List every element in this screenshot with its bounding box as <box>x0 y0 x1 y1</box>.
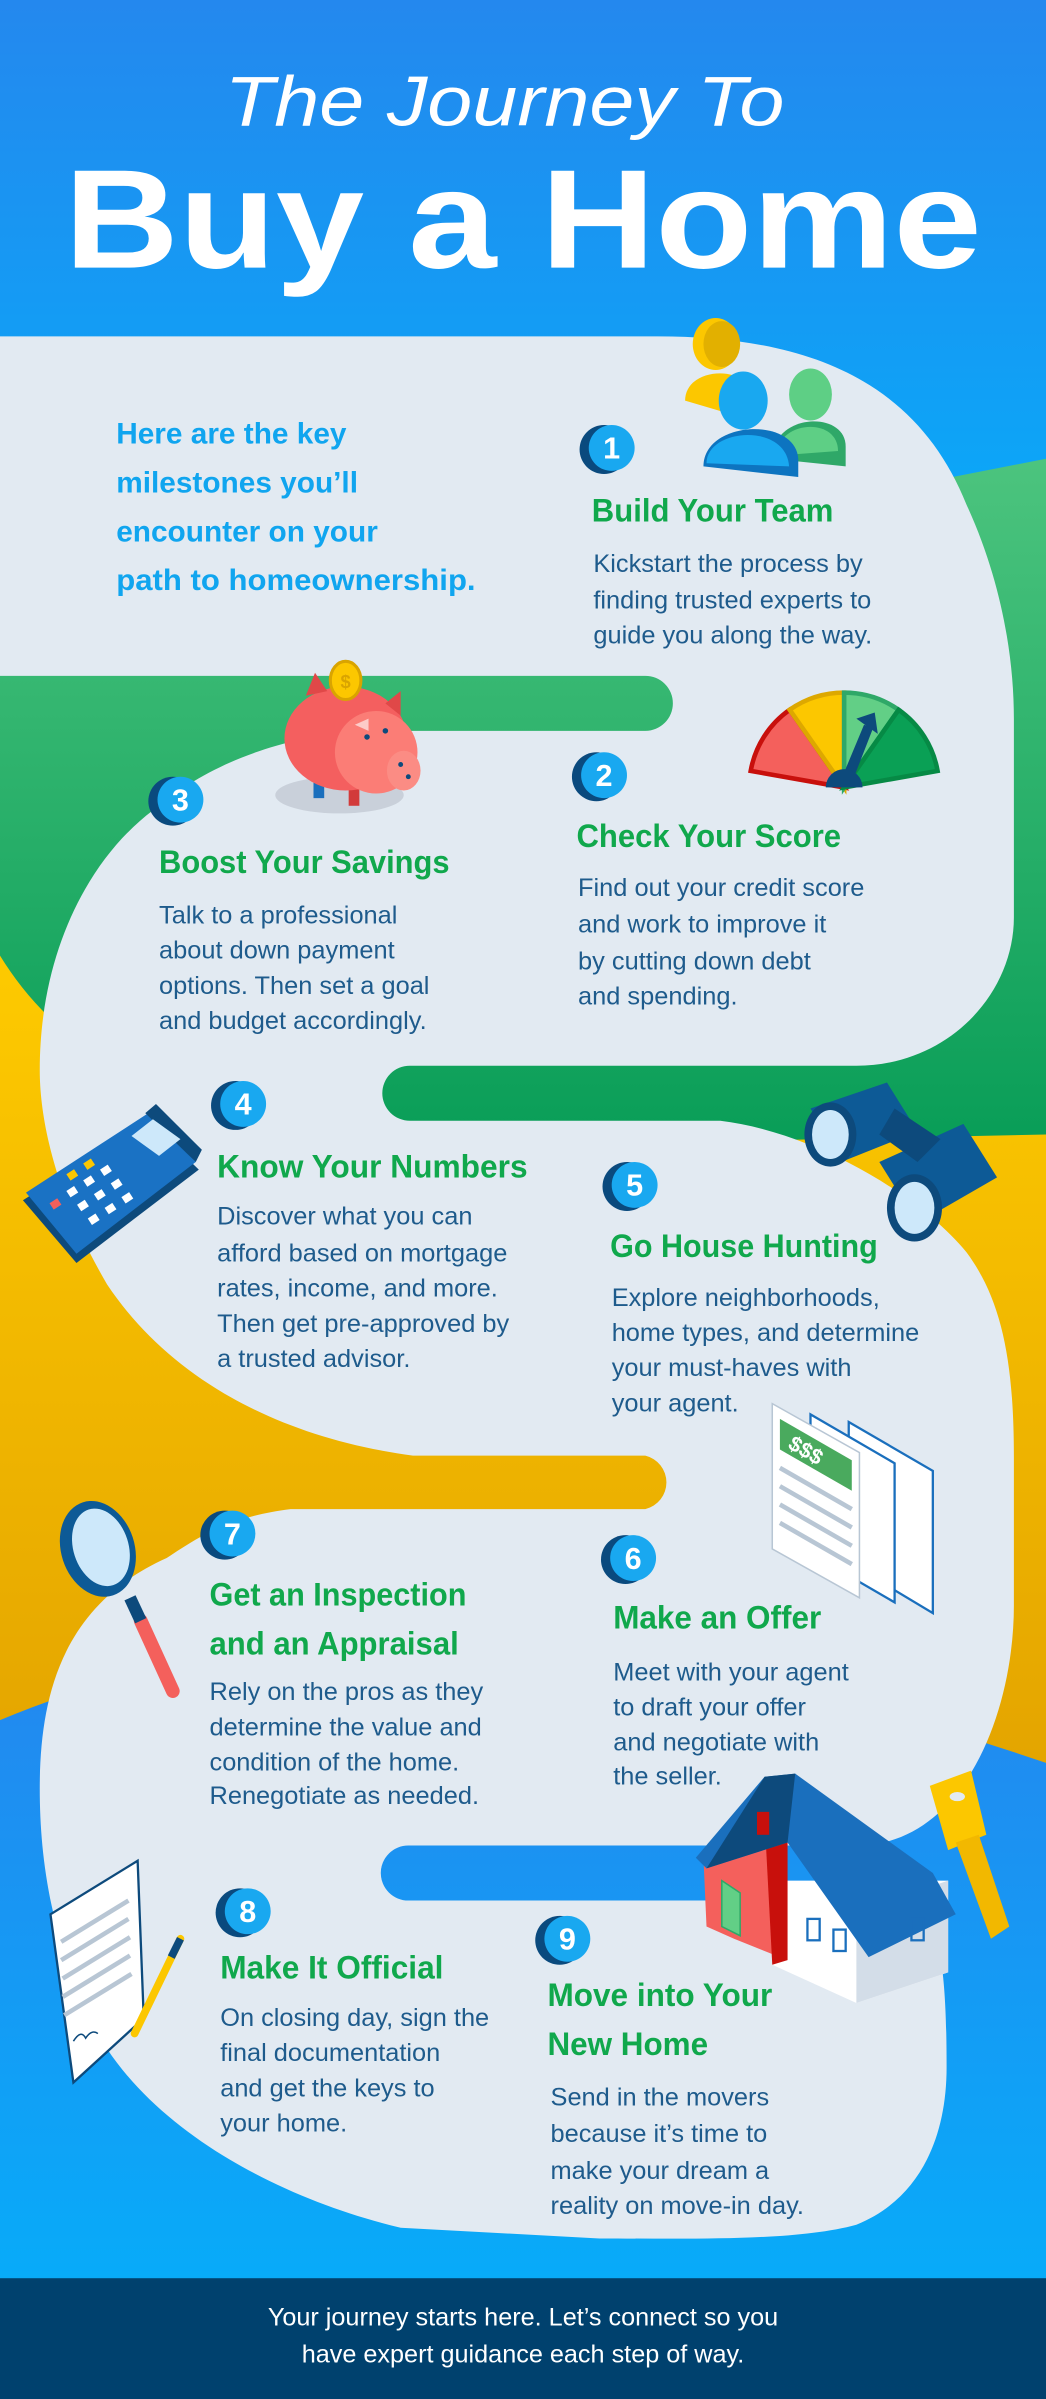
intro text: Here are the key <box>116 417 347 450</box>
number badge 7: 7 <box>224 1517 241 1551</box>
body 5: home types, and determine <box>612 1319 919 1347</box>
body 8: final documentation <box>220 2039 440 2067</box>
heading 1: Build Your Team <box>592 492 833 528</box>
body 4: Then get pre-approved by <box>217 1310 509 1338</box>
body 8: your home. <box>220 2109 347 2137</box>
intro text <box>116 417 476 597</box>
body 3: and budget accordingly. <box>159 1007 427 1035</box>
body 6: the seller. <box>613 1762 722 1790</box>
background: bottom blue band <box>0 1646 1046 2278</box>
number badge 6: 6 <box>625 1542 642 1576</box>
number badge 8 <box>216 1888 271 1937</box>
body 4 <box>217 1203 509 1373</box>
number badge 5 <box>603 1162 658 1211</box>
icon: offer documents: $$$ <box>784 1431 827 1470</box>
heading 9 <box>547 1977 773 2062</box>
body 9 <box>551 2083 804 2220</box>
heading 6: Make an Offer <box>613 1599 822 1635</box>
number badge 1 <box>580 425 635 474</box>
body 4: afford based on mortgage <box>217 1239 507 1267</box>
body 2 <box>578 874 864 1011</box>
number badge 9: 9 <box>559 1922 576 1956</box>
body 8 <box>220 2004 489 2137</box>
body 7: condition of the home. <box>210 1749 459 1777</box>
icon: piggy bank <box>275 661 421 813</box>
body 5: your must-haves with <box>612 1354 851 1382</box>
title: The Journey To <box>225 61 784 140</box>
heading 2: Check Your Score <box>577 818 841 854</box>
body 9: make your dream a <box>551 2157 770 2185</box>
body 5: Explore neighborhoods, <box>612 1284 880 1312</box>
footer: have expert guidance each step of way. <box>302 2340 744 2368</box>
intro text: path to homeownership. <box>116 564 476 597</box>
body 1 <box>593 550 872 650</box>
number badge 4: 4 <box>235 1088 252 1122</box>
body 7 <box>210 1678 483 1810</box>
heading 7: and an Appraisal <box>210 1625 459 1661</box>
heading 4: Know Your Numbers <box>217 1148 528 1184</box>
body 2: and work to improve it <box>578 911 826 939</box>
step 6 <box>601 1535 849 1790</box>
body 3: options. Then set a goal <box>159 972 429 1000</box>
number badge 5: 5 <box>626 1169 643 1203</box>
heading 3: Boost Your Savings <box>159 844 450 880</box>
body 4: a trusted advisor. <box>217 1345 410 1373</box>
step 1 <box>580 425 872 650</box>
body 4: rates, income, and more. <box>217 1275 498 1303</box>
number badge 9 <box>535 1916 590 1965</box>
body 6: Meet with your agent <box>613 1658 849 1686</box>
icon: magnifying glass <box>48 1491 173 1691</box>
body 7: determine the value and <box>210 1713 482 1741</box>
step 4 <box>211 1081 528 1373</box>
number badge 4 <box>211 1081 266 1130</box>
number badge 3: 3 <box>172 783 189 817</box>
body 7: Rely on the pros as they <box>210 1678 483 1706</box>
body 5: your agent. <box>612 1389 739 1417</box>
step 5 <box>603 1162 919 1417</box>
step 3 <box>148 777 450 1035</box>
icon: credit score gauge <box>751 693 938 787</box>
icon: calculator <box>23 1104 202 1263</box>
body 9: Send in the movers <box>551 2083 769 2111</box>
body 3: Talk to a professional <box>159 902 397 930</box>
number badge 1: 1 <box>603 432 620 466</box>
icon: house and key <box>696 1771 1009 2003</box>
number badge 7 <box>200 1511 255 1560</box>
body 4: Discover what you can <box>217 1203 472 1231</box>
body 8: On closing day, sign the <box>220 2004 489 2032</box>
body 6: to draft your offer <box>613 1694 807 1722</box>
body 2: by cutting down debt <box>578 947 811 975</box>
background: yellow band <box>0 956 1046 1835</box>
heading 5: Go House Hunting <box>610 1228 878 1264</box>
heading 9: New Home <box>547 2026 708 2062</box>
body 1: finding trusted experts to <box>593 587 871 615</box>
body 3: about down payment <box>159 937 395 965</box>
winding road <box>0 336 1014 2239</box>
body 1: guide you along the way. <box>593 622 872 650</box>
body 2: and spending. <box>578 983 738 1011</box>
icon: piggy bank: $ <box>341 671 351 692</box>
body 2: Find out your credit score <box>578 874 864 902</box>
body 6 <box>613 1658 849 1790</box>
intro text: milestones you’ll <box>116 466 358 499</box>
step 8 <box>216 1888 489 2137</box>
body 9: because it’s time to <box>551 2120 767 2148</box>
footer: Your journey starts here. Let’s connect so you <box>268 2304 778 2332</box>
icon: offer documents <box>772 1404 933 1613</box>
heading 7 <box>210 1576 466 1661</box>
body 1: Kickstart the process by <box>593 550 863 578</box>
body 5 <box>612 1284 919 1417</box>
title <box>64 61 982 298</box>
number badge 8: 8 <box>239 1895 256 1929</box>
title: Buy a Home <box>64 141 982 298</box>
heading 8: Make It Official <box>220 1950 443 1986</box>
step 2 <box>572 752 864 1011</box>
body 3 <box>159 902 429 1035</box>
heading 7: Get an Inspection <box>210 1576 466 1612</box>
body 6: and negotiate with <box>613 1729 819 1757</box>
footer <box>0 2278 1046 2399</box>
icon: team of people <box>685 318 846 477</box>
body 7: Renegotiate as needed. <box>210 1782 479 1810</box>
step 9 <box>535 1916 804 2220</box>
number badge 3 <box>148 777 203 826</box>
icon: binoculars <box>804 1083 997 1242</box>
intro text: encounter on your <box>116 515 378 548</box>
step 7 <box>200 1511 483 1810</box>
body 8: and get the keys to <box>220 2074 435 2102</box>
background: green band <box>0 459 1046 1193</box>
heading 9: Move into Your <box>547 1977 773 2013</box>
number badge 2: 2 <box>596 759 613 793</box>
icon: signed contract <box>50 1861 180 2082</box>
body 9: reality on move-in day. <box>551 2192 804 2220</box>
number badge 6 <box>601 1535 656 1584</box>
number badge 2 <box>572 752 627 801</box>
